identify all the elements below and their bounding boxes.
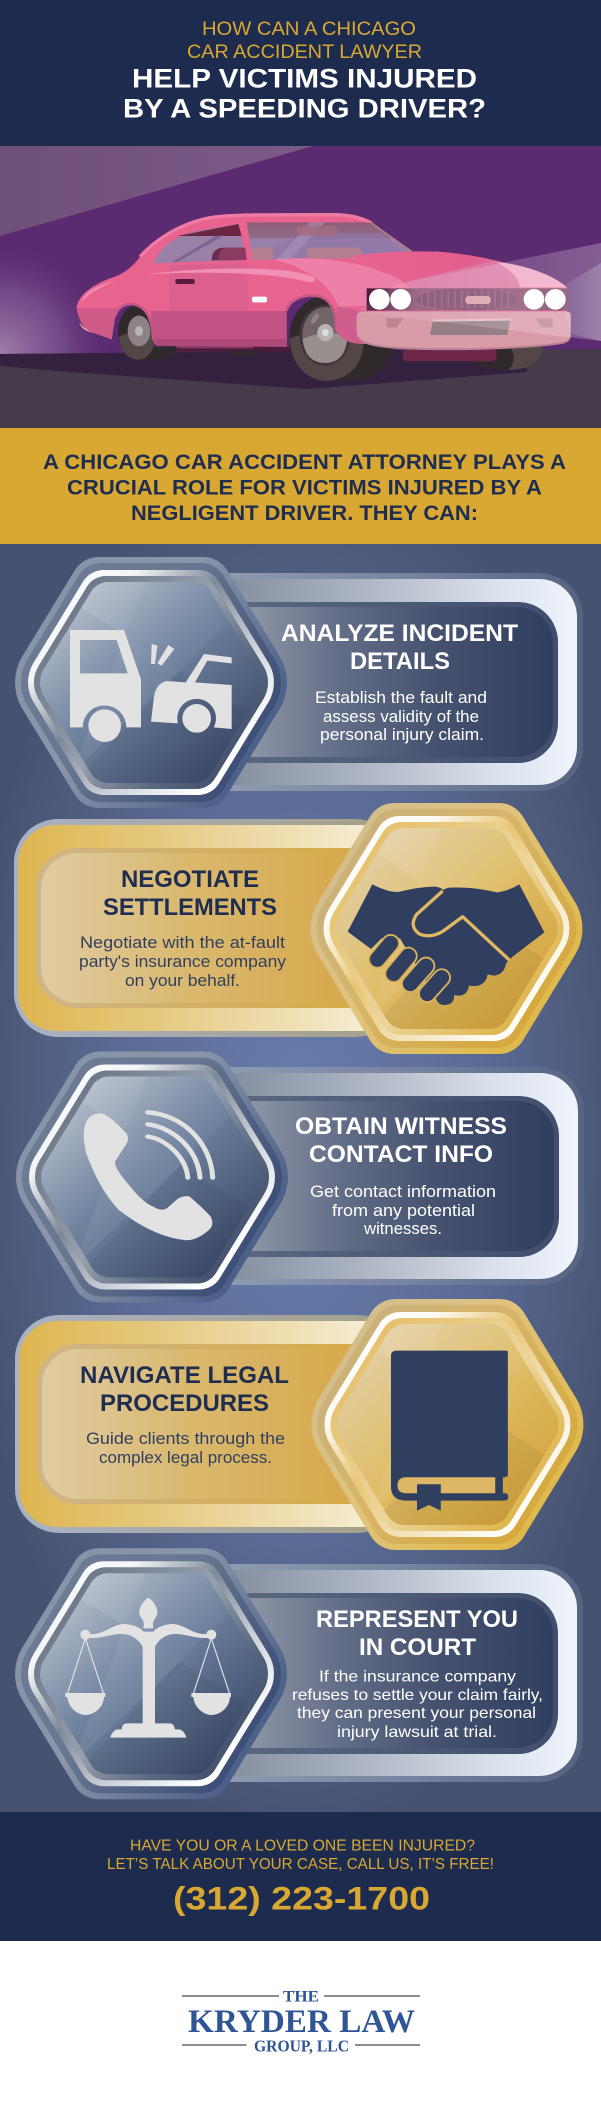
icon: law book <box>391 1351 508 1511</box>
hexagon badge <box>15 557 287 808</box>
grille <box>367 288 567 311</box>
body text: personal injury claim. <box>320 726 484 744</box>
hexagon badge <box>312 1299 583 1550</box>
wheels behind body <box>118 305 157 360</box>
heading <box>103 866 277 921</box>
title: small lines: CAR ACCIDENT LAWYER <box>187 42 422 63</box>
panel: services background <box>0 544 601 1812</box>
icon: scales of justice <box>65 1598 231 1738</box>
icon: handshake <box>348 884 544 1005</box>
door and fender highlights <box>273 258 410 307</box>
hood <box>348 251 567 288</box>
heading: REPRESENT YOU <box>316 1606 518 1633</box>
panel: analyze incident details <box>15 557 583 808</box>
band <box>15 1315 401 1533</box>
body text: refuses to settle your claim fairly, <box>292 1687 543 1704</box>
body text: assess validity of the <box>323 708 479 726</box>
headlight beams <box>357 243 601 341</box>
body text: Get contact information <box>310 1183 496 1201</box>
logo: The Kryder Law Group: THE <box>283 1988 319 2006</box>
heading <box>80 1362 289 1417</box>
heading: DETAILS <box>350 648 450 675</box>
call to action text <box>107 1838 494 1873</box>
body text: witnesses. <box>363 1220 442 1238</box>
body text: injury lawsuit at trial. <box>337 1724 497 1741</box>
panel: navigate legal procedures <box>15 1299 583 1550</box>
band <box>101 1067 584 1285</box>
body shell <box>77 215 567 347</box>
logo: The Kryder Law Group: KRYDER LAW <box>188 2004 415 2040</box>
heading: IN COURT <box>359 1634 476 1661</box>
title: small lines: HOW CAN A CHICAGO <box>202 19 416 40</box>
header banner <box>0 0 601 146</box>
logo: The Kryder Law Group: GROUP, LLC <box>254 2036 349 2056</box>
band <box>100 573 583 791</box>
title: bold lines: HELP VICTIMS INJURED <box>132 64 477 94</box>
body text: Guide clients through the <box>86 1430 285 1448</box>
phone number: (312) 223-1700 <box>173 1880 430 1916</box>
body text: Establish the fault and <box>315 689 487 707</box>
icon: telephone with signal <box>84 1112 213 1240</box>
side window <box>153 224 247 263</box>
intro text: CRUCIAL ROLE FOR VICTIMS INJURED BY A <box>67 476 542 500</box>
heading: OBTAIN WITNESS <box>295 1113 507 1140</box>
icon: truck and car collision <box>70 630 232 742</box>
illustration: pink car speeding at night <box>0 146 601 428</box>
heading: PROCEDURES <box>100 1390 269 1417</box>
car <box>77 215 571 381</box>
body text: party's insurance company <box>79 953 287 971</box>
heading: ANALYZE INCIDENT <box>281 620 518 647</box>
body text <box>310 1183 496 1238</box>
heading: NEGOTIATE <box>121 866 259 893</box>
heading <box>316 1606 518 1661</box>
heading: SETTLEMENTS <box>103 894 277 921</box>
call to action text: LET’S TALK ABOUT YOUR CASE, CALL US, IT’S FREE! <box>107 1856 494 1873</box>
bumper <box>357 314 571 350</box>
band <box>14 819 400 1037</box>
title: bold lines <box>123 64 486 124</box>
intro banner <box>0 428 601 544</box>
body text: they can present your personal <box>297 1705 536 1722</box>
windshield <box>247 222 410 260</box>
body text: Negotiate with the at-fault <box>80 934 285 952</box>
panel: negotiate settlements <box>14 803 582 1054</box>
call to action footer <box>0 1812 601 1941</box>
heading: CONTACT INFO <box>309 1141 493 1168</box>
body text: If the insurance company <box>319 1668 516 1686</box>
body text: on your behalf. <box>125 972 240 990</box>
heading: NAVIGATE LEGAL <box>80 1362 289 1389</box>
hexagon badge <box>311 803 582 1054</box>
title: small lines <box>187 19 422 63</box>
body text <box>86 1430 285 1467</box>
panel: obtain witness contact info <box>16 1052 584 1302</box>
body text: from any potential <box>332 1202 475 1220</box>
intro text: NEGLIGENT DRIVER. THEY CAN: <box>131 501 478 525</box>
call to action text: HAVE YOU OR A LOVED ONE BEEN INJURED? <box>130 1838 475 1854</box>
band <box>100 1564 583 1782</box>
panel: represent you in court <box>15 1548 583 1799</box>
title: bold lines: BY A SPEEDING DRIVER? <box>123 94 486 124</box>
body text <box>292 1668 543 1741</box>
body text: complex legal process. <box>99 1449 272 1467</box>
logo: The Kryder Law Group <box>182 1988 420 2056</box>
body text <box>79 934 287 990</box>
intro text <box>43 450 566 525</box>
headlights <box>369 289 566 310</box>
intro text: A CHICAGO CAR ACCIDENT ATTORNEY PLAYS A <box>43 450 566 474</box>
heading <box>295 1113 507 1168</box>
heading <box>281 620 518 675</box>
hexagon badge <box>16 1052 288 1302</box>
hexagon badge <box>15 1548 287 1799</box>
body text <box>315 689 487 744</box>
